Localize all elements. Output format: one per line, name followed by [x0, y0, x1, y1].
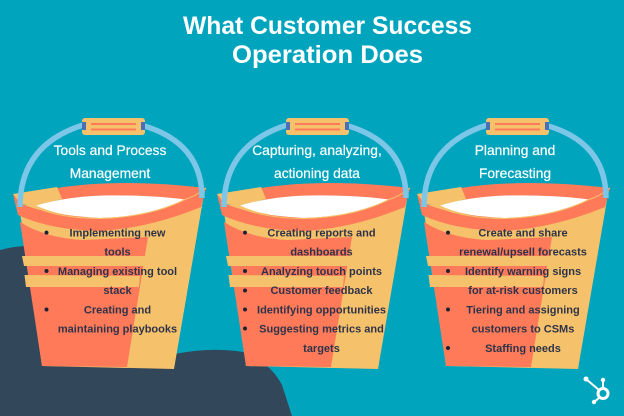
title: What Customer Success — [183, 12, 472, 40]
bullet list: tools and process: Creating and — [84, 304, 151, 316]
bullet list: data: Suggesting metrics and — [259, 324, 384, 336]
heading: tools and process management — [54, 143, 166, 181]
title: Operation Does — [232, 41, 423, 69]
bullet list: tools and process: tools — [104, 246, 131, 258]
bullet list: planning: customers to CSMs — [472, 324, 574, 336]
bullet list: planning: Identify warning signs — [465, 266, 581, 278]
title — [183, 12, 472, 69]
bullet list: tools and process: stack — [103, 285, 132, 297]
bullet list: planning: Staffing needs — [485, 343, 561, 355]
heading: tools and process management: Management — [70, 166, 150, 181]
heading: capturing analyzing actioning data: Capturing, analyzing, — [252, 143, 382, 158]
panel: capturing analyzing actioning data bucket — [217, 118, 410, 369]
bullet list: data — [243, 228, 386, 355]
bullet list: data: Customer feedback — [270, 285, 373, 297]
icon: bucket 2 — [217, 118, 410, 369]
panel: planning and forecasting bucket — [417, 118, 610, 369]
heading: planning and forecasting: Forecasting — [479, 166, 551, 181]
heading: tools and process management: Tools and Process — [54, 143, 166, 158]
icon: bucket 1 — [13, 118, 206, 369]
bullet list: tools and process — [44, 228, 177, 336]
bullet list: data: targets — [303, 343, 340, 355]
panel: tools and process management bucket — [13, 118, 206, 369]
bullet list: data: Analyzing touch points — [261, 266, 382, 278]
heading: capturing analyzing actioning data: actioning data — [274, 166, 360, 181]
icon: bucket 3 — [417, 118, 610, 369]
heading: planning and forecasting: Planning and — [475, 143, 555, 158]
bullet list: planning: renewal/upsell forecasts — [459, 246, 587, 258]
bullet list: data: Identifying opportunities — [257, 304, 386, 316]
bullet list: tools and process: maintaining playbooks — [58, 324, 177, 336]
bullet list: tools and process: Managing existing tool — [58, 266, 177, 278]
bullet list: planning: for at-risk customers — [468, 285, 578, 297]
bullet list: planning: Tiering and assigning — [466, 304, 580, 316]
bullet list: planning — [446, 228, 587, 355]
bullet list: data: Creating reports and — [267, 228, 376, 240]
heading: capturing analyzing actioning data — [252, 143, 382, 181]
icon: hubspot logo — [584, 376, 608, 404]
bullet list: tools and process: Implementing new — [70, 228, 166, 240]
bullet list: data: dashboards — [290, 246, 353, 258]
heading: planning and forecasting — [475, 143, 555, 181]
dark hill shape — [0, 246, 292, 416]
bullet list: planning: Create and share — [478, 228, 568, 240]
